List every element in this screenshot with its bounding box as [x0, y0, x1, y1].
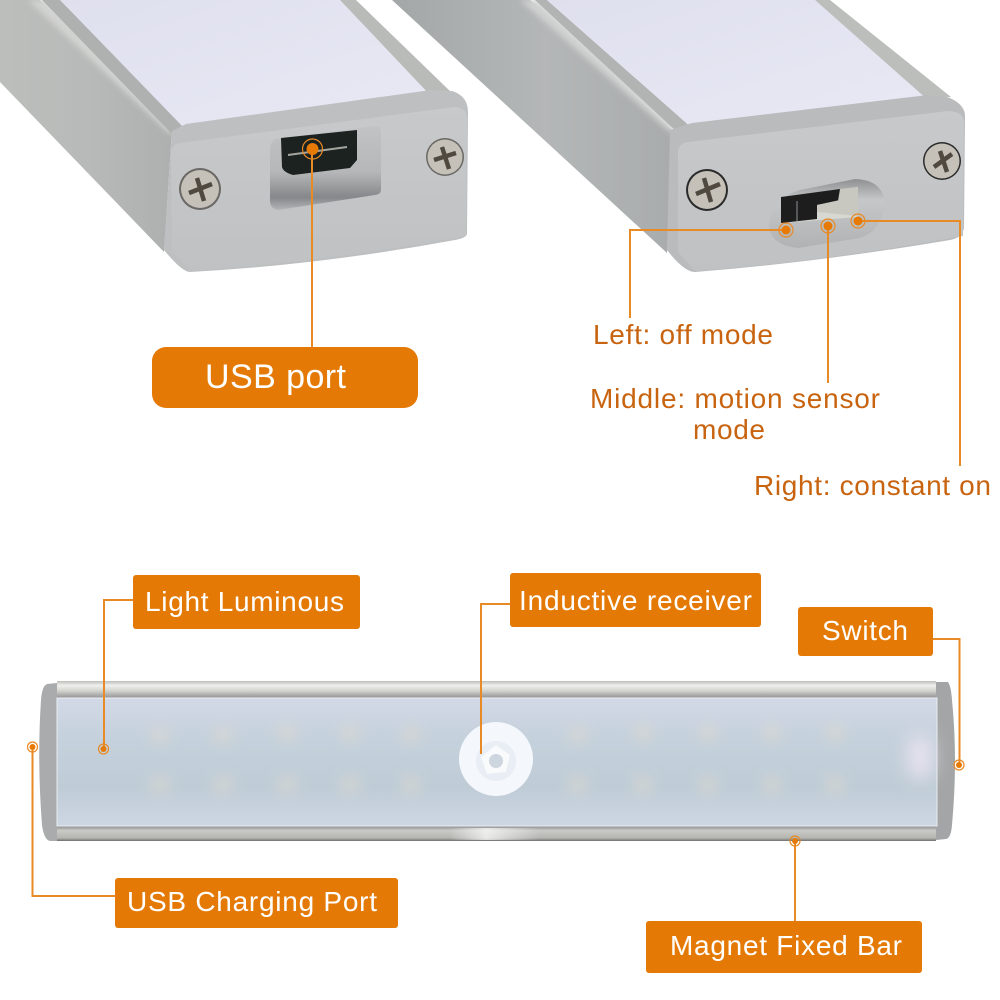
callout line: inductive receiver: [481, 604, 510, 754]
marker: switch: [954, 760, 964, 770]
marker: right switch position: [851, 214, 865, 228]
callout line: USB port: [311, 148, 313, 347]
text: middle motion sensor mode: mode: [693, 414, 765, 445]
marker: magnet fixed bar: [790, 836, 800, 846]
marker: left switch position: [779, 223, 793, 237]
full light bar front view: [39, 681, 955, 841]
screw right: [426, 138, 464, 176]
switch slot: [769, 179, 885, 248]
label: USB charging port: [115, 878, 398, 928]
marker: middle switch position: [821, 219, 835, 233]
label: USB charging port: USB Charging Port: [127, 886, 377, 917]
callout line: middle motion sensor mode: [827, 226, 829, 383]
screw right: [923, 142, 961, 180]
label: USB port: [152, 347, 418, 408]
micro USB socket: [281, 130, 357, 175]
callout line: USB charging port: [32, 747, 115, 896]
screw left: [686, 169, 728, 211]
diffuser lens: [57, 698, 937, 826]
label: switch: [798, 607, 933, 656]
label: light luminous: [133, 575, 360, 629]
marker: light luminous: [98, 744, 108, 754]
text: middle motion sensor mode: Middle: motion sensor: [590, 383, 880, 414]
text: middle motion sensor mode: [590, 383, 880, 445]
callout line: magnet fixed bar: [794, 841, 796, 921]
screw left: [179, 168, 221, 210]
marker: USB port: [302, 139, 322, 159]
label: light luminous: Light Luminous: [145, 586, 344, 617]
text: left off mode: Left: off mode: [593, 319, 773, 350]
motion sensor: [459, 722, 533, 796]
callout line: light luminous: [104, 600, 133, 749]
label: magnet fixed bar: Magnet Fixed Bar: [670, 930, 902, 961]
USB recess: [270, 126, 381, 210]
callout line: left off mode: [630, 230, 786, 318]
marker: USB charging port: [28, 742, 38, 752]
label: inductive receiver: Inductive receiver: [519, 585, 752, 616]
label: inductive receiver: [510, 573, 761, 627]
left device: USB end view: [0, 0, 468, 272]
callout line: switch: [933, 639, 960, 765]
label: USB port: USB port: [205, 358, 347, 396]
label: magnet fixed bar: [646, 921, 922, 973]
label: switch: Switch: [822, 615, 908, 646]
right device: switch end view: [392, 0, 965, 272]
text: right constant on: Right: constant on: [754, 470, 991, 501]
callout line: right constant on: [858, 221, 960, 466]
